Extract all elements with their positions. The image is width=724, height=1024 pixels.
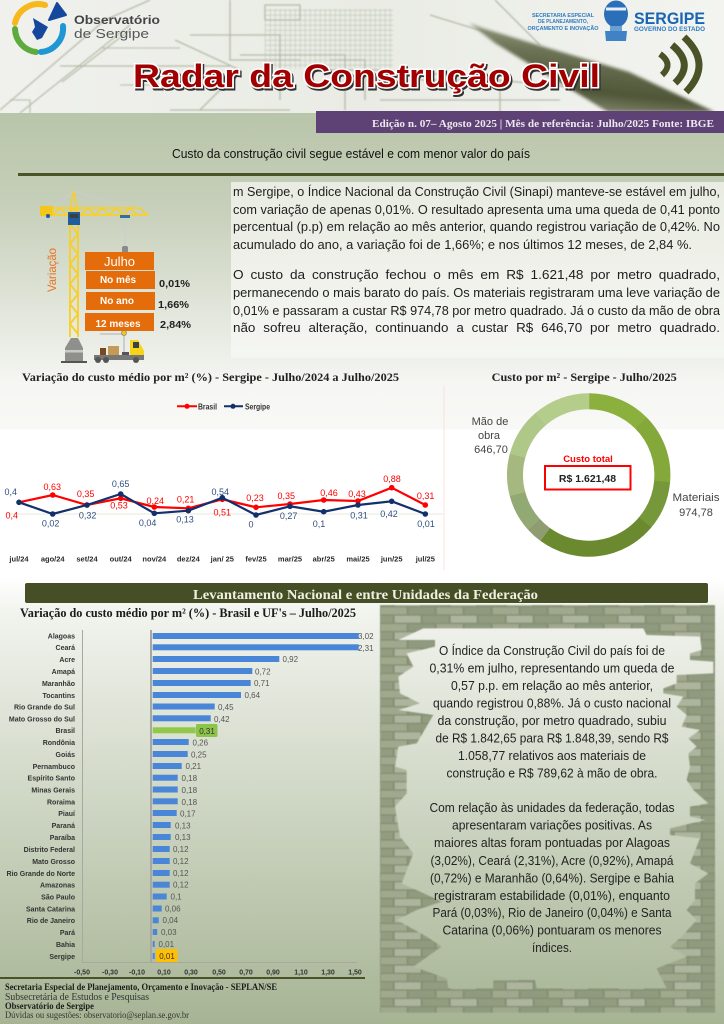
- box: No mês: [86, 271, 191, 290]
- panel: intro text: 0,01% e passaram a custar R$ 974,78 por metro quadrado. Já o custo da mão de obra: [233, 303, 721, 318]
- value labels: 0,12: [173, 869, 189, 878]
- bars: [153, 633, 359, 959]
- value labels: 0,03: [161, 928, 177, 937]
- state labels: Brasil: [56, 728, 75, 735]
- Brasil data labels: 0,63: [44, 482, 61, 492]
- state labels: Acre: [59, 657, 75, 664]
- panel: crane infographic: [40, 190, 192, 363]
- state labels: Bahia: [56, 942, 75, 949]
- state labels: Ceará: [56, 645, 75, 652]
- state labels: Amapá: [52, 669, 75, 676]
- headline: Custo da construção civil segue estável e com menor valor do país: [172, 146, 530, 161]
- text block: national summary: apresentaram variações positivas. As: [452, 818, 652, 832]
- x axis months: abr/25: [313, 554, 335, 564]
- panel: brick wall frame: [380, 605, 715, 1013]
- value labels: 3,02: [358, 632, 374, 641]
- Sergipe data labels: 0,1: [313, 519, 325, 529]
- text block: national summary: de R$ 1.842,65 para R$ 1.848,39, sendo R$: [436, 730, 669, 746]
- Sergipe data labels: 0,65: [112, 479, 129, 489]
- legend: Brasil: [198, 402, 217, 412]
- section banner: Levantamento Nacional e entre Unidades da Federação: [193, 588, 538, 603]
- x axis months: [8, 554, 435, 564]
- Sergipe data labels: [4, 479, 435, 530]
- x axis ticks: 0,70: [239, 970, 253, 976]
- box: No mês: 0,01%: [159, 278, 191, 290]
- x axis ticks: 1,30: [321, 970, 335, 976]
- panel: intro text: m Sergipe, o Índice Nacional da Construção Civil (Sinapi) manteve-se estável em julho,: [233, 184, 720, 199]
- Brasil data labels: 0,4: [5, 511, 18, 521]
- logo: Observatório de Sergipe: [15, 3, 160, 52]
- text block: national summary: [430, 643, 675, 955]
- Sergipe data labels: 0,01: [417, 519, 435, 529]
- value labels: 0,18: [182, 774, 198, 783]
- state labels: Rio Grande do Norte: [7, 871, 75, 878]
- logo: Secretaria de Planejamento: ORÇAMENTO E INOVAÇÃO: [528, 25, 599, 32]
- x axis ticks: 1,10: [294, 970, 308, 976]
- state labels: Roraima: [47, 800, 75, 806]
- icon: truck: [94, 330, 144, 363]
- box: 12 meses: 12 meses: [95, 319, 141, 330]
- value labels: [158, 632, 374, 949]
- line chart title: Variação do custo médio por m² (%) - Sergipe - Julho/2024 a Julho/2025: [22, 372, 399, 384]
- box: 12 meses: [85, 313, 192, 331]
- state labels: Santa Catarina: [26, 906, 75, 914]
- icon: pen: [469, 23, 715, 112]
- donut chart: [472, 371, 720, 579]
- footer text: Secretaria Especial de Planejamento, Orçamento e Inovação - SEPLAN/SE: [5, 982, 277, 992]
- text block: national summary: O Índice da Construção Civil do país foi de: [439, 643, 665, 658]
- state labels: Rondônia: [43, 740, 75, 747]
- x axis months: fev/25: [245, 554, 267, 564]
- headline rule: [18, 173, 724, 176]
- state labels: Piauí: [58, 811, 76, 818]
- x axis ticks: 0,50: [212, 970, 226, 976]
- Brasil data labels: 0,31: [417, 491, 434, 501]
- value labels: 0,12: [173, 857, 189, 866]
- Sergipe data labels: 0,54: [212, 487, 229, 497]
- box: No ano: [86, 292, 190, 311]
- series: Sergipe: [16, 491, 428, 518]
- logo: Secretaria de Planejamento: SERGIPE: [634, 10, 705, 28]
- state labels: Paraná: [52, 823, 75, 830]
- state labels: Rio Grande do Sul: [14, 704, 75, 712]
- text block: national summary: Pará (0,03%), Rio de Janeiro (0,04%) e Santa: [432, 905, 672, 920]
- x axis ticks: 0,90: [266, 970, 280, 976]
- x axis ticks: -0,30: [102, 970, 118, 976]
- state labels: Maranhão: [42, 681, 75, 688]
- center: custo total: Custo total: [563, 454, 613, 465]
- value labels: 0,18: [182, 786, 198, 795]
- value labels: 0,13: [175, 822, 191, 830]
- Sergipe data labels: 0,13: [176, 514, 194, 524]
- text block: national summary: maiores altas foram pontuadas por Alagoas: [434, 835, 670, 850]
- label: Variação: Variação: [45, 248, 59, 292]
- Brasil data labels: 0,35: [278, 491, 295, 501]
- center: custo total: [545, 454, 630, 490]
- value labels: 0,1: [170, 892, 182, 902]
- Brasil data labels: 0,51: [214, 507, 231, 517]
- state labels: Pernambuco: [33, 764, 75, 771]
- edition bar: [316, 111, 724, 133]
- label: Materiais: 974,78: [679, 507, 713, 519]
- value labels: 0,06: [165, 904, 181, 914]
- Sergipe data labels: 0,04: [139, 518, 156, 528]
- line chart: [4, 385, 444, 570]
- value labels: 0,04: [162, 916, 179, 925]
- Brasil data labels: 0,24: [147, 496, 164, 506]
- text block: national summary: registraram estabilidade (0,01%), enquanto: [434, 888, 670, 903]
- Sergipe data labels: 0: [248, 520, 254, 530]
- panel: intro text: [231, 182, 724, 358]
- label: Materiais: Materiais: [672, 492, 720, 504]
- x axis months: mai/25: [346, 554, 370, 564]
- state labels: São Paulo: [41, 894, 75, 902]
- text block: national summary: índices.: [532, 940, 572, 955]
- segment: Mão de obra: [485, 371, 693, 579]
- label: Materiais: [672, 492, 720, 519]
- value labels: 0,45: [218, 703, 234, 712]
- box: Julho: [85, 252, 154, 270]
- footer text: Subsecretária de Estudos e Pesquisas: [5, 992, 149, 1003]
- value labels: 0,92: [282, 655, 299, 664]
- panel: intro text: não sofreu alteração, continuando a custar R$ 646,70 por metro quadrado.: [233, 320, 720, 335]
- state labels: Minas Gerais: [31, 788, 75, 794]
- x axis ticks: [74, 970, 362, 976]
- label: Mão de obra: Mão de: [472, 416, 508, 428]
- edition bar: Edição n. 07– Agosto 2025 | Mês de referência: Julho/2025 Fonte: IBGE: [372, 119, 714, 130]
- text block: national summary: construção e R$ 789,62 à mão de obra.: [446, 766, 658, 780]
- state labels: Sergipe: [49, 954, 75, 961]
- value labels: 0,12: [173, 880, 189, 890]
- state labels: Paraíba: [50, 835, 75, 842]
- state labels: Goiás: [56, 752, 75, 759]
- Brasil data labels: [5, 474, 434, 521]
- bar chart: [7, 630, 374, 976]
- panel: intro text: permanecendo o mais barato do país. Os materiais registraram uma leve variação de: [233, 285, 720, 300]
- legend: [177, 402, 270, 412]
- value labels: 0,71: [254, 679, 270, 688]
- value labels: 2,31: [358, 644, 374, 653]
- box: No ano: 1,66%: [158, 299, 190, 311]
- box: No mês: No mês: [100, 275, 136, 286]
- footer text: [5, 982, 277, 1020]
- series: Brasil: [19, 485, 428, 511]
- value labels: 0,72: [255, 668, 271, 676]
- center: custo total: R$ 1.621,48: [559, 473, 616, 485]
- value labels: 0,18: [182, 798, 198, 807]
- icon: sound waves: [660, 37, 699, 92]
- value labels: 0,01: [158, 940, 175, 949]
- text block: national summary: da construção, por metro quadrado, subiu: [438, 713, 666, 728]
- icon: crane: [40, 190, 147, 363]
- value labels: 0,42: [214, 715, 230, 724]
- logo: Observatório de Sergipe: de Sergipe: [74, 27, 149, 41]
- x axis ticks: -0,50: [74, 970, 90, 976]
- value labels: 0,17: [180, 810, 196, 818]
- box: No ano: No ano: [100, 296, 134, 307]
- Brasil data labels: 0,21: [177, 494, 194, 504]
- value labels: 0,25: [191, 750, 207, 760]
- logo: Observatório de Sergipe: Observatório: [74, 13, 160, 27]
- label: Mão de obra: [472, 416, 508, 456]
- x axis months: jan/ 25: [210, 554, 234, 564]
- x axis months: ago/24: [41, 554, 65, 564]
- Brasil data labels: 0,53: [110, 500, 128, 510]
- box: Julho: Julho: [104, 254, 135, 269]
- x axis months: dez/24: [177, 554, 201, 564]
- highlight: Brasil: [153, 724, 218, 737]
- value labels: 0,12: [173, 845, 189, 854]
- panel: intro text: com variação de apenas 0,01%. O resultado apresenta uma uma queda de 0,41 ponto: [233, 202, 720, 217]
- state labels: Pará: [60, 930, 75, 937]
- panel: intro text: acumulado do ano, a variação foi de 1,66%; e nos últimos 12 meses, de 2,84 %.: [233, 237, 692, 252]
- Sergipe data labels: 0,42: [380, 509, 398, 519]
- x axis ticks: -0,10: [129, 970, 145, 976]
- highlight: Sergipe: [156, 949, 178, 962]
- Sergipe data labels: 0,4: [4, 487, 17, 497]
- Brasil data labels: 0,35: [77, 489, 94, 499]
- text block: national summary: 1.058,77 relativos aos materiais de: [458, 748, 646, 763]
- label: Mão de obra: 646,70: [474, 444, 508, 456]
- value labels: 0,64: [244, 691, 261, 700]
- state labels: Distrito Federal: [24, 847, 75, 854]
- footer text: Observatório de Sergipe: [5, 1001, 94, 1011]
- panel: intro text: O custo da construção fechou o mês em R$ 1.621,48 por metro quadrado,: [233, 267, 720, 282]
- x axis ticks: 0,10: [157, 970, 171, 976]
- text block: national summary: Com relação às unidades da federação, todas: [430, 800, 675, 815]
- Sergipe data labels: 0,31: [350, 510, 368, 520]
- value labels: 0,21: [186, 762, 202, 771]
- footer text: Dúvidas ou sugestões: observatorio@seplan.se.gov.br: [5, 1010, 189, 1020]
- x axis months: mar/25: [278, 554, 302, 564]
- x axis ticks: 0,30: [184, 970, 198, 976]
- state labels: Rio de Janeiro: [27, 918, 75, 925]
- highlight: Sergipe: 0,01: [159, 952, 175, 961]
- donut chart title: Custo por m² - Sergipe - Julho/2025: [492, 372, 677, 384]
- text block: national summary: (0,72%) e Maranhão (0,64%). Sergipe e Bahia: [430, 870, 675, 886]
- box: 12 meses: 2,84%: [160, 319, 192, 331]
- state labels: Mato Grosso do Sul: [9, 716, 75, 724]
- label: Mão de obra: obra: [478, 430, 501, 442]
- state labels: [7, 634, 76, 961]
- logo: Secretaria de Planejamento: DE PLANEJAMENTO,: [538, 19, 588, 25]
- x axis months: jul/25: [415, 554, 435, 564]
- segment: Materiais: [484, 371, 693, 579]
- bar chart title: Variação do custo médio por m² (%) - Brasil e UF's – Julho/2025: [20, 606, 356, 620]
- Brasil data labels: 0,23: [246, 493, 264, 503]
- Brasil data labels: 0,46: [320, 488, 338, 498]
- text block: national summary: (3,02%), Ceará (2,31%), Acre (0,92%), Amapá: [430, 853, 674, 868]
- section banner: [25, 583, 708, 603]
- legend: Sergipe: [245, 402, 270, 412]
- state labels: Tocantins: [42, 693, 75, 700]
- x axis months: jul/24: [8, 554, 29, 564]
- text block: national summary: 0,31% em julho, representando um queda de: [430, 660, 674, 676]
- state labels: Mato Grosso: [32, 859, 75, 866]
- x axis months: set/24: [76, 554, 98, 564]
- state labels: Alagoas: [48, 634, 75, 640]
- highlight: Brasil: 0,31: [199, 727, 215, 736]
- Brasil data labels: 0,88: [383, 474, 401, 484]
- Sergipe data labels: 0,32: [79, 511, 96, 521]
- logo: Secretaria de Planejamento: SECRETARIA ESPECIAL: [532, 13, 595, 19]
- text block: national summary: Catarina (0,06%) pontuaram os menores: [442, 922, 662, 938]
- logo: Secretaria de Planejamento: GOVERNO DO ESTADO: [634, 26, 705, 33]
- logo: Secretaria de Planejamento: [528, 0, 705, 41]
- title: Radar da Construção Civil: [133, 58, 600, 94]
- state labels: Amazonas: [40, 882, 75, 890]
- value labels: 0,26: [192, 738, 209, 748]
- header blueprint background: [0, 0, 724, 113]
- x axis months: nov/24: [142, 554, 167, 564]
- footer rule: [0, 977, 365, 979]
- x axis months: out/24: [110, 554, 133, 564]
- state labels: Espírito Santo: [28, 776, 75, 782]
- Sergipe data labels: 0,27: [280, 511, 297, 521]
- x axis ticks: 1,50: [348, 970, 362, 976]
- text block: national summary: 0,57 p.p. em relação ao mês anterior,: [451, 678, 653, 693]
- Brasil data labels: 0,43: [348, 489, 366, 499]
- value labels: 0,13: [175, 833, 191, 842]
- Sergipe data labels: 0,02: [42, 518, 59, 528]
- x axis months: jun/25: [380, 554, 403, 564]
- text block: national summary: quando registrou 0,88%. Já o custo nacional: [433, 696, 671, 710]
- panel: intro text: percentual (p.p) em relação ao mês anterior, quando registrou variação de 0,42%. No: [233, 219, 720, 234]
